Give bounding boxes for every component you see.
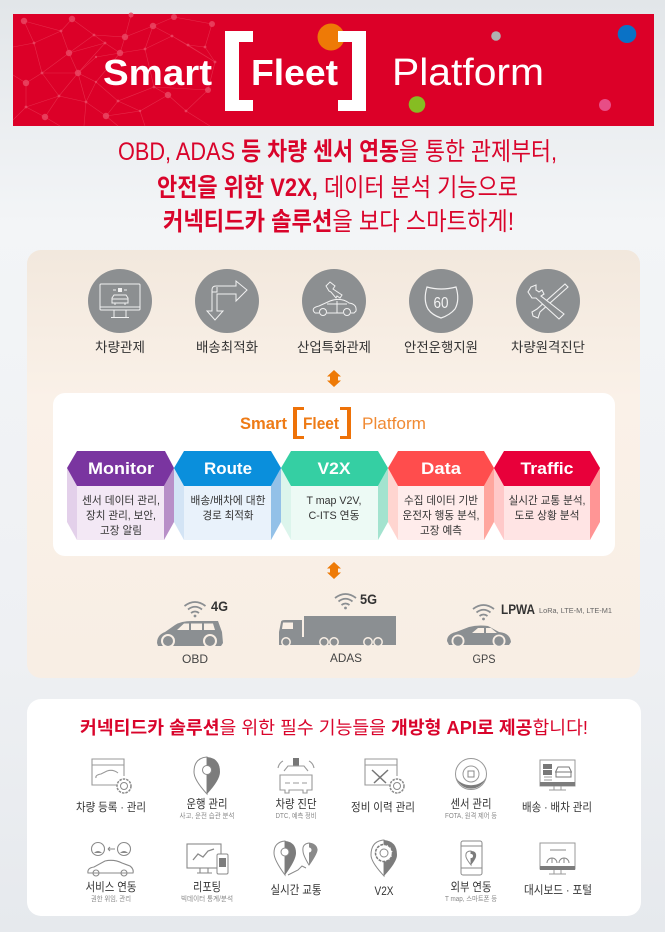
feature: V2X	[371, 840, 397, 898]
panel: open API features	[27, 699, 641, 916]
icon: remote diagnosis	[516, 269, 580, 333]
card: Route	[174, 451, 281, 540]
feature: reporting: 리포팅	[193, 880, 221, 894]
banner logo: Fleet: Fleet	[251, 52, 338, 93]
feature: sensor management	[445, 758, 497, 820]
arrow: top double arrow	[327, 370, 341, 387]
card: Route: 배송/배차에 대한	[190, 494, 266, 507]
feature: reporting	[181, 844, 233, 903]
card: Data: Data	[421, 459, 462, 478]
feature: sensor management: 센서 관리	[450, 797, 492, 811]
feature: delivery dispatch	[522, 760, 592, 814]
label: industry control: 산업특화관제	[297, 340, 371, 355]
card: Data: 수집 데이터 기반	[404, 494, 478, 507]
card: Monitor: Monitor	[88, 459, 154, 478]
vehicle: GPS sedan: GPS	[472, 654, 496, 666]
vehicle: GPS sedan: LoRa, LTE-M, LTE-M1	[539, 606, 612, 615]
feature: sensor management: FOTA, 원격 제어 등	[445, 811, 497, 820]
heading: open API: 커넥티드카 솔루션을 위한 필수 기능들을 개방형 API로 제공합니다!	[80, 718, 588, 738]
panel: white platform box	[53, 393, 615, 556]
feature: vehicle diagnosis	[276, 758, 316, 820]
banner logo: left bracket	[225, 31, 253, 111]
card: V2X: C-ITS 연동	[308, 509, 360, 522]
feature: operation management	[180, 757, 234, 820]
vehicle: OBD van: 4G	[211, 599, 228, 614]
card: Monitor: 장치 관리, 보안,	[86, 509, 156, 522]
card: Traffic: 도로 상황 분석	[514, 509, 580, 522]
feature: vehicle diagnosis: 차량 진단	[276, 797, 316, 811]
feature: service link	[86, 842, 136, 903]
card: Traffic	[494, 451, 600, 540]
card: Monitor: 센서 데이터 관리,	[82, 494, 160, 507]
feature: delivery dispatch: 배송 · 배차 관리	[522, 801, 592, 814]
label: delivery optimization: 배송최적화	[196, 340, 258, 355]
card: Traffic: 실시간 교통 분석,	[508, 494, 586, 507]
vehicle: OBD van	[157, 599, 228, 666]
headline	[118, 138, 557, 236]
small logo: Fleet	[303, 415, 339, 433]
feature: maintenance history: 정비 이력 관리	[351, 801, 415, 814]
small logo	[240, 407, 426, 439]
card: Traffic: Traffic	[520, 459, 574, 478]
label: remote diagnosis: 차량원격진단	[511, 340, 585, 355]
vehicle: OBD van: OBD	[182, 654, 208, 666]
headline: 커넥티드카 솔루션을 보다 스마트하게!	[163, 208, 514, 236]
feature: service link: 권한 위임, 관리	[91, 894, 131, 903]
feature: vehicle registration	[76, 759, 146, 814]
card: V2X	[281, 451, 388, 540]
card: Data	[388, 451, 494, 540]
feature: maintenance history	[351, 759, 415, 814]
label: safe driving: 안전운행지원	[404, 340, 478, 355]
feature: external link: 외부 연동	[450, 880, 492, 894]
feature: vehicle diagnosis: DTC, 예측 정비	[276, 811, 316, 820]
card: Monitor	[67, 451, 174, 540]
icon: safe driving 60: 60	[434, 295, 449, 312]
vehicle: ADAS truck: ADAS	[330, 653, 362, 665]
icon: industry control	[302, 269, 366, 333]
card: V2X: V2X	[318, 459, 351, 478]
card: V2X: T map V2V,	[306, 495, 362, 507]
feature: vehicle registration: 차량 등록 · 관리	[76, 801, 146, 814]
small logo: Smart	[240, 415, 287, 433]
vehicle: ADAS truck: 5G	[360, 592, 377, 607]
feature: dashboard portal	[524, 843, 592, 897]
headline: OBD, ADAS 등 차량 센서 연동을 통한 관제부터,	[118, 138, 557, 166]
card: Data: 고장 예측	[420, 524, 462, 537]
card: Monitor: 고장 알림	[100, 523, 142, 537]
icon: delivery optimization	[195, 269, 259, 333]
card: Data: 운전자 행동 분석,	[402, 509, 480, 522]
feature: V2X: V2X	[374, 884, 394, 898]
banner logo: right bracket	[338, 31, 366, 111]
feature: external link: T map, 스마트폰 등	[445, 894, 498, 903]
feature: external link	[445, 841, 498, 903]
banner	[13, 12, 654, 126]
arrow: bottom double arrow	[327, 562, 341, 579]
headline: 안전을 위한 V2X, 데이터 분석 기능으로	[157, 174, 518, 202]
feature: operation management: 사고, 운전 습관 분석	[180, 811, 234, 820]
feature: dashboard portal: 대시보드 · 포털	[524, 883, 592, 897]
small logo: Platform	[362, 414, 426, 433]
feature: real-time traffic	[270, 841, 322, 897]
icon: vehicle control	[88, 269, 152, 333]
feature: service link: 서비스 연동	[86, 880, 136, 894]
vehicle: GPS sedan: LPWA	[501, 602, 535, 617]
feature: reporting: 빅데이터 통계/분석	[181, 894, 233, 903]
panel: platform architecture	[27, 250, 640, 678]
vehicle: ADAS truck	[279, 592, 396, 665]
banner logo: Smart: Smart	[103, 52, 212, 93]
card: Route: 경로 최적화	[202, 509, 254, 522]
feature: real-time traffic: 실시간 교통	[270, 883, 322, 897]
icon: safe driving 60	[409, 269, 473, 333]
card: Route: Route	[204, 459, 252, 478]
banner logo: Platform: Platform	[392, 52, 544, 94]
feature: operation management: 운행 관리	[186, 796, 228, 811]
vehicle: GPS sedan	[447, 602, 612, 666]
label: vehicle control: 차량관제	[95, 340, 145, 355]
